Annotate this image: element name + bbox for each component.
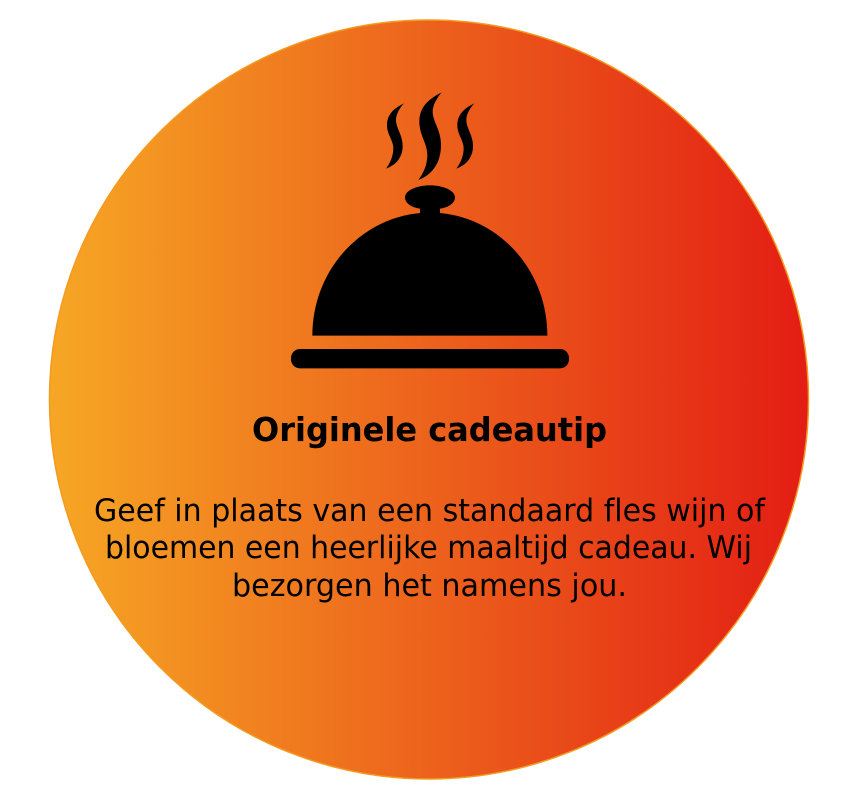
icon: dome bbox=[312, 213, 547, 336]
body line 3: bezorgen het namens jou. bbox=[232, 568, 627, 604]
body text bbox=[94, 493, 766, 604]
icon: steam centre bbox=[418, 92, 442, 180]
icon: steam left bbox=[386, 103, 404, 169]
title: Originele cadeautip bbox=[252, 410, 607, 449]
body line 2: bloemen een heerlijke maaltijd cadeau. Wij bbox=[105, 530, 752, 566]
icon: dome handle bbox=[405, 185, 455, 214]
icon: plate bbox=[291, 349, 569, 368]
icon: steam right bbox=[456, 103, 474, 169]
icon: covered serving dish with steam bbox=[291, 92, 569, 368]
body line 1: Geef in plaats van een standaard fles wijn of bbox=[94, 493, 766, 529]
